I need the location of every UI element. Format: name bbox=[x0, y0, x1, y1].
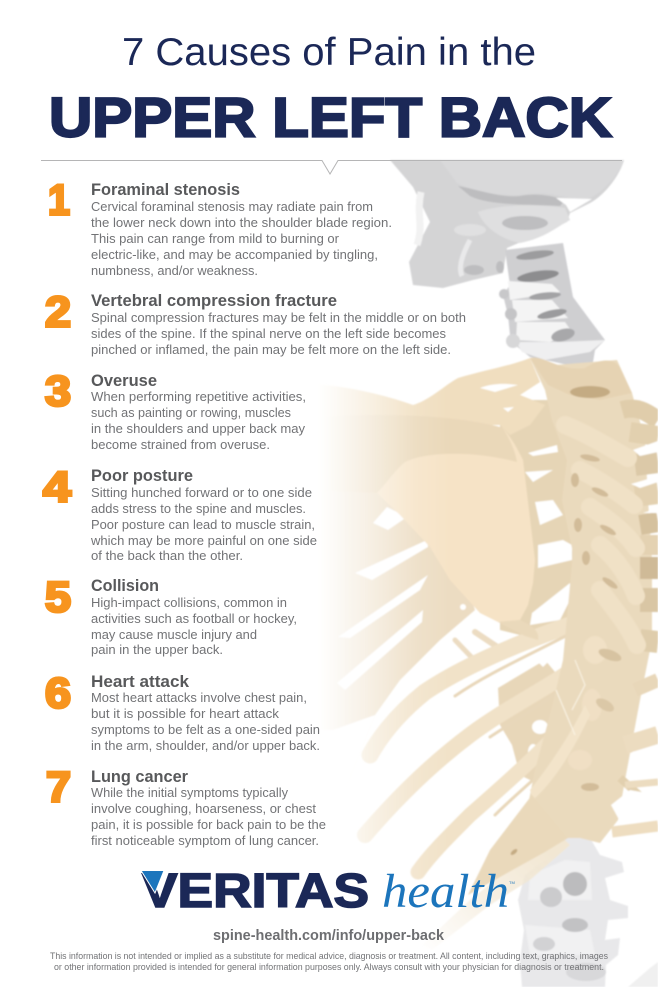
text 3: such as painting or rowing, muscles bbox=[91, 405, 291, 420]
text 6: symptoms to be felt as a one-sided pain bbox=[91, 722, 320, 737]
text 5: High-impact collisions, common in bbox=[91, 595, 287, 610]
text 4: adds stress to the spine and muscles. bbox=[91, 501, 306, 516]
shoulder blade bbox=[378, 434, 535, 622]
text 7: While the initial symptoms typically bbox=[91, 785, 288, 800]
cause 3 bbox=[45, 368, 306, 452]
Veritas Health logo bbox=[141, 865, 515, 918]
logo wordmark Veritas: VERITAS bbox=[142, 865, 369, 918]
gaps beside the shoulder blade bbox=[524, 444, 573, 626]
text 4: Poor posture can lead to muscle strain, bbox=[91, 517, 315, 532]
number 1: 1 bbox=[48, 176, 70, 224]
text 1: Cervical foraminal stenosis may radiate pain from bbox=[91, 199, 373, 214]
text 4: of the back than the other. bbox=[91, 548, 243, 563]
cause 7 bbox=[46, 764, 326, 848]
right side ribs bbox=[612, 409, 658, 832]
text 7: pain, it is possible for back pain to be the bbox=[91, 817, 326, 832]
text 1: This pain can range from mild to burning or bbox=[91, 231, 340, 246]
rear rib mass bbox=[335, 492, 476, 728]
text 5: activities such as football or hockey, bbox=[91, 611, 297, 626]
text 1: numbness, and/or weakness. bbox=[91, 263, 258, 278]
text 3 bbox=[91, 389, 306, 452]
text 2 bbox=[91, 310, 466, 357]
upper vertebrae detail bbox=[530, 358, 632, 400]
number 2: 2 bbox=[45, 288, 71, 336]
number 4: 4 bbox=[43, 464, 71, 512]
text 7: involve coughing, hoarseness, or chest bbox=[91, 801, 316, 816]
text 5 bbox=[91, 595, 297, 657]
heading 5: Collision bbox=[91, 577, 159, 595]
number 6: 6 bbox=[45, 670, 71, 718]
cause 2 bbox=[45, 288, 466, 357]
logo wordmark health: health bbox=[382, 865, 509, 918]
gaps at the right edge bbox=[631, 441, 658, 765]
text 3: in the shoulders and upper back may bbox=[91, 421, 305, 436]
logo blue triangle bbox=[141, 870, 164, 893]
clavicle and upper shoulder bbox=[334, 358, 543, 434]
cervical vertebrae bbox=[499, 243, 605, 368]
skull and jaw bbox=[390, 160, 624, 288]
divider with notch bbox=[41, 160, 622, 174]
text 6 bbox=[91, 690, 320, 753]
text 6: but it is possible for heart attack bbox=[91, 706, 279, 721]
text 3: When performing repetitive activities, bbox=[91, 389, 306, 404]
title line 2: UPPER LEFT BACK bbox=[49, 86, 612, 148]
heading 3: Overuse bbox=[91, 372, 157, 390]
text 5: pain in the upper back. bbox=[91, 642, 223, 657]
text 2: sides of the spine. If the spinal nerve on the left side becomes bbox=[91, 326, 446, 341]
cause 4 bbox=[43, 464, 317, 563]
trademark: TM bbox=[509, 880, 515, 885]
text 6: in the arm, shoulder, and/or upper back. bbox=[91, 738, 320, 753]
disclaimer: or other information provided is intended for general information purposes only. Always consult with your physician for diagnosis or treatment. bbox=[54, 962, 604, 972]
ribs and shoulder blade bbox=[300, 358, 658, 895]
illustration: skeleton of neck and upper back bbox=[300, 160, 658, 987]
number 3: 3 bbox=[45, 368, 71, 416]
heading 2: Vertebral compression fracture bbox=[91, 292, 337, 310]
spine column bbox=[527, 358, 652, 843]
heading 1: Foraminal stenosis bbox=[91, 181, 240, 199]
text 2: Spinal compression fractures may be felt in the middle or on both bbox=[91, 310, 466, 325]
text 1: the lower neck down into the shoulder blade region. bbox=[91, 215, 392, 230]
front ribs bbox=[365, 618, 590, 872]
cause 6 bbox=[45, 670, 320, 753]
text 5: may cause muscle injury and bbox=[91, 627, 257, 642]
lower vertebrae detail bbox=[530, 636, 623, 800]
text 2: pinched or inflamed, the pain may be felt more on the left side. bbox=[91, 342, 451, 357]
number 7: 7 bbox=[46, 764, 71, 812]
text 4 bbox=[90, 485, 317, 563]
number 5: 5 bbox=[45, 574, 71, 622]
text 1: electric-like, and may be accompanied by tingling, bbox=[91, 247, 378, 262]
bottom right rib fragment bbox=[628, 962, 658, 987]
cause 1 bbox=[48, 176, 392, 278]
disclaimer: This information is not intended or implied as a substitute for medical advice, diagnosis or treatment. All content, including text, graphics, images bbox=[50, 951, 608, 961]
text 7: first noticeable symptom of lung cancer. bbox=[91, 833, 319, 848]
text 6: Most heart attacks involve chest pain, bbox=[91, 690, 307, 705]
text 1 bbox=[91, 199, 392, 278]
bottom rib bundle bbox=[468, 795, 568, 895]
cause 5 bbox=[45, 574, 297, 657]
heading 4: Poor posture bbox=[91, 467, 193, 485]
title line 1: 7 Causes of Pain in the bbox=[122, 31, 536, 74]
lumbar vertebrae bbox=[518, 838, 628, 987]
website url: spine-health.com/info/upper-back bbox=[213, 928, 445, 944]
text 7 bbox=[91, 785, 326, 848]
central rib mass behind vertebrae bbox=[497, 662, 556, 781]
disclaimer bbox=[50, 951, 608, 972]
thin rear ribs bbox=[452, 628, 498, 658]
heading 6: Heart attack bbox=[91, 673, 190, 691]
text 4: which may be more painful on one side bbox=[90, 533, 317, 548]
title bbox=[49, 31, 612, 148]
gaps between rear ribs bbox=[335, 507, 466, 790]
thoracic spinous processes bbox=[565, 425, 637, 645]
heading 7: Lung cancer bbox=[91, 768, 189, 786]
text 4: Sitting hunched forward or to one side bbox=[91, 485, 312, 500]
text 3: become strained from overuse. bbox=[91, 437, 270, 452]
ribs beside the shoulder blade bbox=[499, 399, 574, 636]
fading lower ribs bbox=[439, 840, 570, 938]
